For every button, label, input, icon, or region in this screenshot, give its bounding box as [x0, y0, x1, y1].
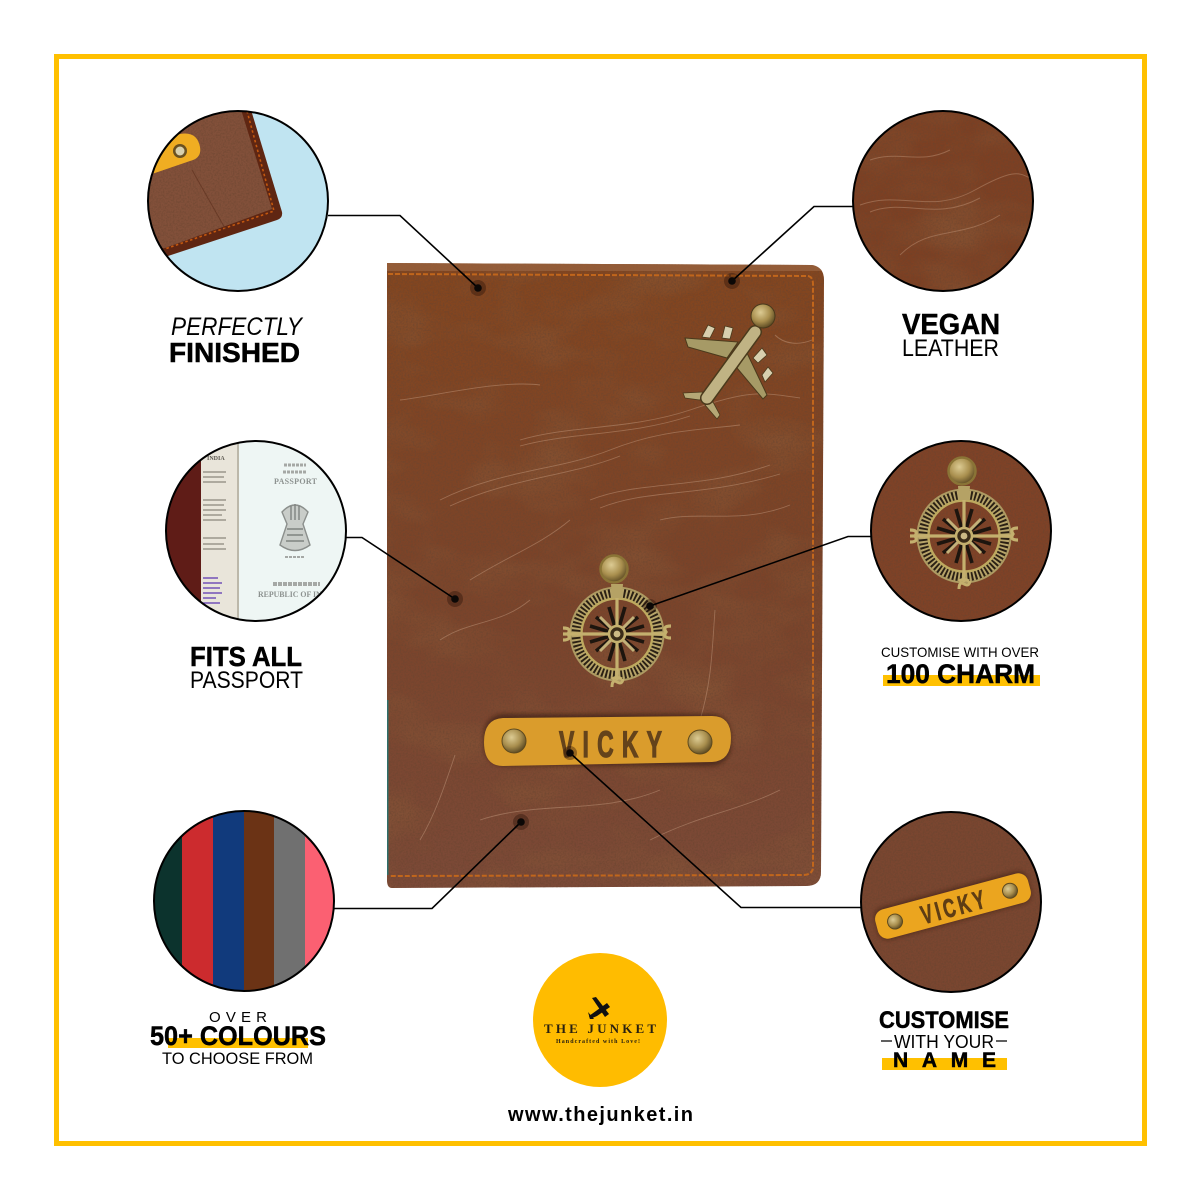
callout line: fits all passport — [346, 538, 463, 607]
label: leather: LEATHER — [902, 335, 999, 362]
panel: vegan leather — [853, 111, 1035, 362]
tagline: Handcrafted with Love! — [556, 1039, 640, 1045]
panel: 100 charm — [871, 441, 1051, 689]
tag name text: VICKY — [559, 723, 662, 765]
label: over: OVER — [209, 1009, 267, 1026]
detail circle: passport — [166, 441, 346, 621]
tag name text: VICKY — [918, 884, 988, 930]
detail circle: cover corner — [140, 100, 328, 291]
label: customise: CUSTOMISE — [879, 1007, 1009, 1034]
detail circle: name tag closeup — [861, 812, 1041, 992]
label: 100 charm: 100 CHARM — [886, 659, 1035, 689]
emblem — [280, 504, 310, 557]
callout line: charm — [643, 536, 871, 613]
detail circle: leather texture — [853, 111, 1035, 291]
label: vegan: VEGAN — [902, 309, 1000, 341]
label: to choose from: TO CHOOSE FROM — [162, 1049, 313, 1068]
passport word: PASSPORT — [274, 477, 318, 486]
callout line: perfectly finished — [328, 216, 486, 296]
detail circle: compass closeup — [871, 441, 1051, 621]
stitching — [388, 274, 813, 876]
highlight — [168, 1038, 308, 1048]
website url: www.thejunket.in — [507, 1104, 693, 1126]
leather wrinkles — [400, 335, 812, 840]
label: perfectly: PERFECTLY — [171, 313, 304, 341]
label: fits all: FITS ALL — [190, 641, 302, 672]
icon: logo plane — [588, 997, 610, 1019]
label: customise with over: CUSTOMISE WITH OVER — [881, 644, 1039, 660]
cover top edge — [387, 263, 822, 271]
logo: the junket — [533, 953, 667, 1087]
label: 50+ colours: 50+ COLOURS — [150, 1021, 326, 1051]
cover left spine edge — [387, 700, 388, 875]
name tag — [484, 714, 731, 766]
label: finished: FINISHED — [169, 337, 300, 368]
label: with your: WITH YOUR — [894, 1032, 994, 1052]
icon: plane charm — [683, 304, 775, 419]
india word: INDIA — [207, 456, 225, 462]
passport cover — [386, 262, 824, 888]
panel: 50+ colours — [150, 811, 334, 1068]
highlight — [882, 1058, 1007, 1070]
panel: perfectly finished — [140, 100, 328, 368]
label: name: NAME — [893, 1049, 996, 1072]
panel: fits all passport — [166, 441, 346, 694]
highlight — [883, 675, 1040, 686]
callout line: colours — [334, 814, 529, 908]
republic words: REPUBLIC OF INDIA — [258, 590, 336, 599]
callout line: vegan leather — [724, 206, 853, 289]
icon: compass charm — [563, 556, 671, 687]
panel: customise with your name — [861, 812, 1041, 1072]
detail circle: colour stripes — [154, 811, 334, 991]
wordmark: THE JUNKET — [544, 1021, 656, 1036]
label: passport: PASSPORT — [190, 667, 303, 694]
callout line: name — [563, 746, 861, 908]
